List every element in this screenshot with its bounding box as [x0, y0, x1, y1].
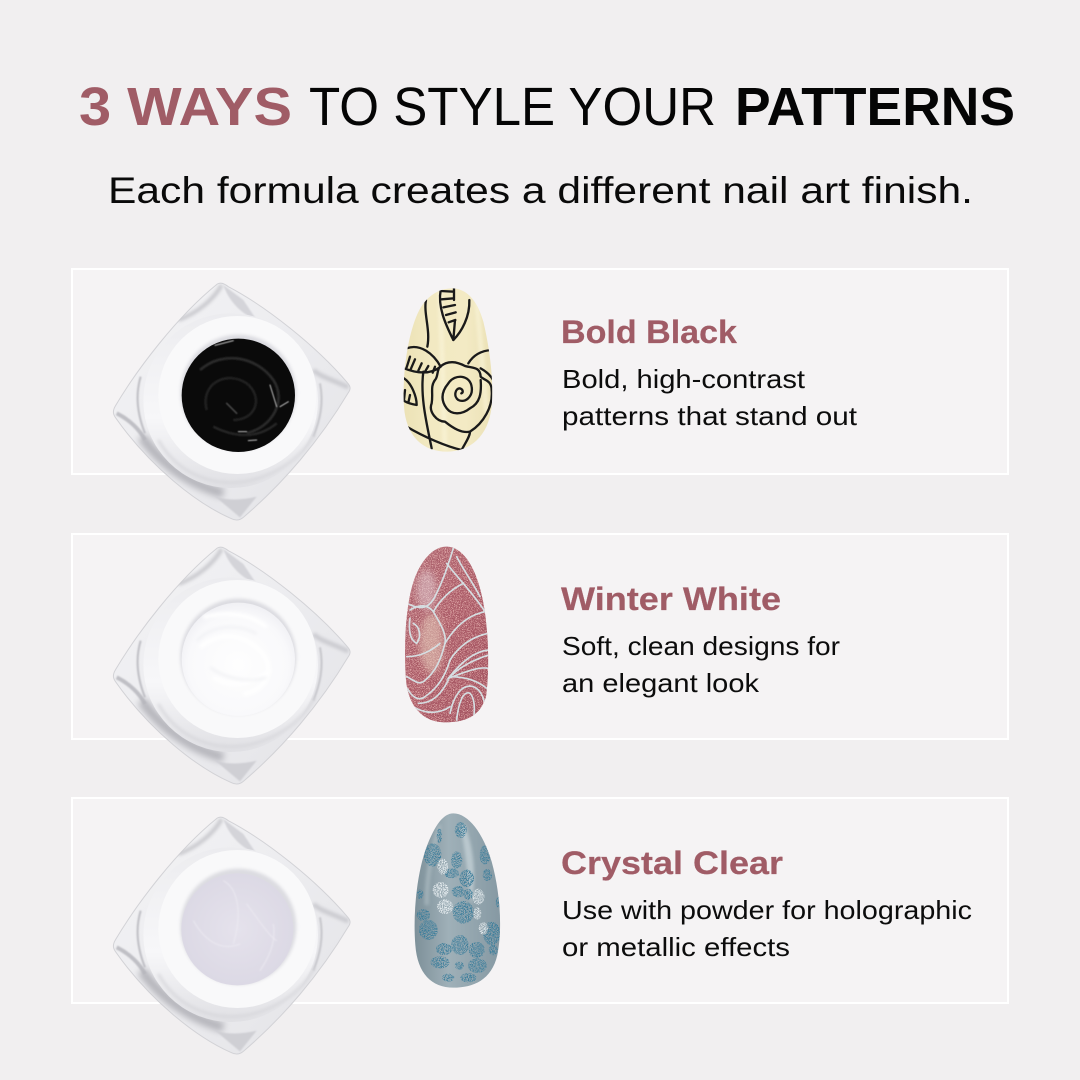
- text: bold black: Bold, high-contrast: [562, 364, 806, 394]
- text: bold black: Bold Black: [561, 314, 737, 350]
- subtitle: Each formula creates a different nail art finish.: [108, 170, 973, 211]
- title: 3 WAYS: [79, 77, 292, 137]
- title: TO STYLE YOUR: [309, 77, 716, 137]
- title: PATTERNS: [735, 77, 1015, 137]
- text: winter white: Winter White: [561, 581, 781, 617]
- panel: winter white: [72, 534, 1008, 739]
- text: crystal clear: or metallic effects: [562, 932, 790, 962]
- panel: crystal clear: [72, 798, 1008, 1003]
- text: winter white: Soft, clean designs for: [562, 631, 840, 661]
- nail: grey-blue glitter flowers: [415, 813, 501, 988]
- text: crystal clear: Crystal Clear: [561, 845, 783, 881]
- infographic canvas: [71, 87, 1013, 1054]
- panel: bold black: [72, 269, 1008, 474]
- jar: winter white gel: [113, 547, 350, 784]
- jar: bold black gel: [113, 283, 350, 520]
- text: bold black: [561, 314, 858, 431]
- text: bold black: patterns that stand out: [562, 401, 858, 431]
- text: crystal clear: Use with powder for holographic: [562, 895, 972, 925]
- nail: rose glitter with white swirls: [403, 543, 493, 723]
- title: [79, 77, 1015, 137]
- text: winter white: [561, 581, 840, 698]
- text: winter white: an elegant look: [562, 668, 760, 698]
- nail: yellow rose line art: [403, 288, 494, 452]
- jar: crystal clear gel: [113, 817, 350, 1054]
- text: crystal clear: [561, 845, 972, 962]
